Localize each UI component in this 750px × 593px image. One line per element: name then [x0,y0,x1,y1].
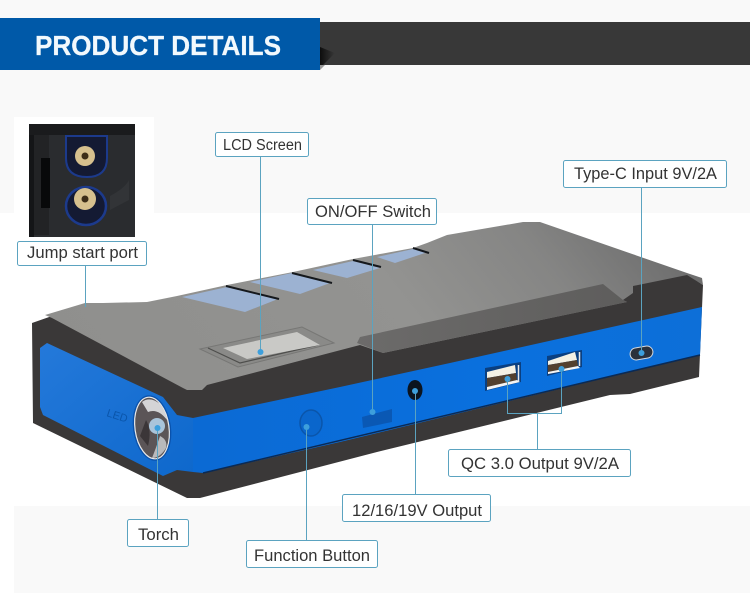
front blue panel [193,307,702,473]
torch [129,393,175,463]
power bank device [32,222,703,498]
label: Function Button [246,540,378,568]
label: ON/OFF Switch: ON/OFF Switch [315,202,431,221]
label: LCD Screen: LCD Screen [223,137,302,154]
label: Torch: Torch [138,525,179,544]
type-c port [629,345,654,361]
label: 12/16/19V Output [342,494,490,522]
jump start port photo [29,124,135,237]
label: Type-C Input [564,160,726,188]
indicator windows [182,248,429,312]
function button [300,410,322,436]
LCD screen [200,327,334,367]
on/off switch [362,409,392,428]
label: ON/OFF Switch [308,198,436,224]
label: Jump start port [18,242,146,266]
USB port 1 [485,362,521,391]
left blue panel [40,343,193,476]
LED mark: LED [105,407,129,425]
top face [45,222,703,390]
title: PRODUCT DETAILS [35,30,281,61]
label: Jump start port: Jump start port [27,243,138,262]
label: Torch [128,520,188,546]
12/16/19V jack [408,380,422,400]
label: Function Button: Function Button [254,546,370,565]
label: 12/16/19V Output: 12/16/19V Output [352,501,482,520]
label: QC 3.0 Output: QC 3.0 Output 9V/2A [461,454,620,473]
chamfer [357,284,627,353]
USB port 2 [547,350,582,376]
label: QC 3.0 Output [448,450,630,476]
label: LCD Screen [216,132,308,156]
header banner [0,18,750,70]
leader dots [154,349,644,431]
device body [32,274,703,498]
label: Type-C Input: Type-C Input 9V/2A [574,164,718,183]
leader lines [86,157,642,540]
